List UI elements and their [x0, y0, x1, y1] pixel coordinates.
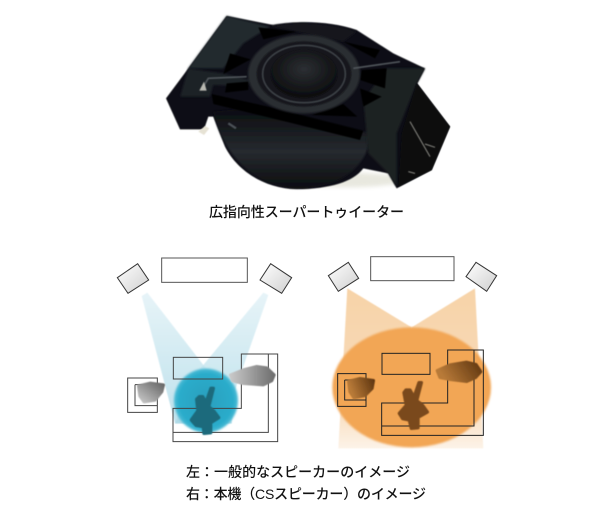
cylinder body	[213, 107, 370, 188]
person in centre	[191, 388, 219, 433]
person on chair	[139, 383, 163, 402]
left sound spread	[338, 288, 412, 448]
heading: product name: 広指向性スーパートゥイーター	[209, 204, 404, 220]
person on sofa side	[231, 367, 274, 385]
corner bracket left	[188, 16, 270, 68]
edge highlight on body	[228, 123, 236, 128]
TV	[371, 257, 454, 281]
blue listening area	[174, 369, 238, 433]
right speaker icon	[260, 264, 292, 293]
armchair	[338, 374, 366, 406]
frame ribs	[180, 68, 250, 97]
diagram: CS speaker (right)	[328, 257, 497, 448]
wire highlight	[199, 82, 207, 91]
caption line: right diagram: 右：本機（CSスピーカー）のイメージ	[186, 486, 426, 502]
frame windows	[223, 27, 387, 117]
caption line: left diagram: 左：一般的なスピーカーのイメージ	[186, 464, 410, 480]
tweeter housing	[166, 16, 450, 189]
dome	[271, 50, 337, 98]
orange listening area	[332, 327, 491, 447]
person in centre	[399, 383, 427, 428]
left speaker icon	[117, 264, 149, 293]
armchair	[128, 378, 157, 412]
front frame rib	[212, 94, 363, 140]
TV	[162, 258, 247, 282]
caption	[186, 464, 426, 502]
table	[173, 357, 223, 379]
L-shaped sofa	[173, 354, 278, 442]
table	[382, 353, 430, 374]
right sound spread	[410, 288, 483, 448]
right sound beam	[175, 293, 268, 423]
terminal pins	[408, 122, 435, 173]
diagram: ordinary speaker (left)	[117, 258, 292, 442]
person on sofa side	[437, 362, 481, 381]
solder wires and highlights	[202, 62, 400, 89]
ground shadow	[290, 173, 403, 187]
person on chair	[349, 379, 373, 398]
left sound beam	[142, 293, 232, 423]
left speaker icon	[328, 262, 359, 291]
right speaker icon	[466, 262, 497, 291]
corner bracket right	[363, 68, 425, 187]
top rim behind surround	[270, 23, 357, 42]
left leg highlight	[198, 126, 209, 135]
L-shaped sofa	[382, 350, 483, 435]
product photo: super tweeter	[166, 16, 450, 189]
rear terminal	[398, 83, 450, 187]
surround ring	[248, 35, 360, 113]
